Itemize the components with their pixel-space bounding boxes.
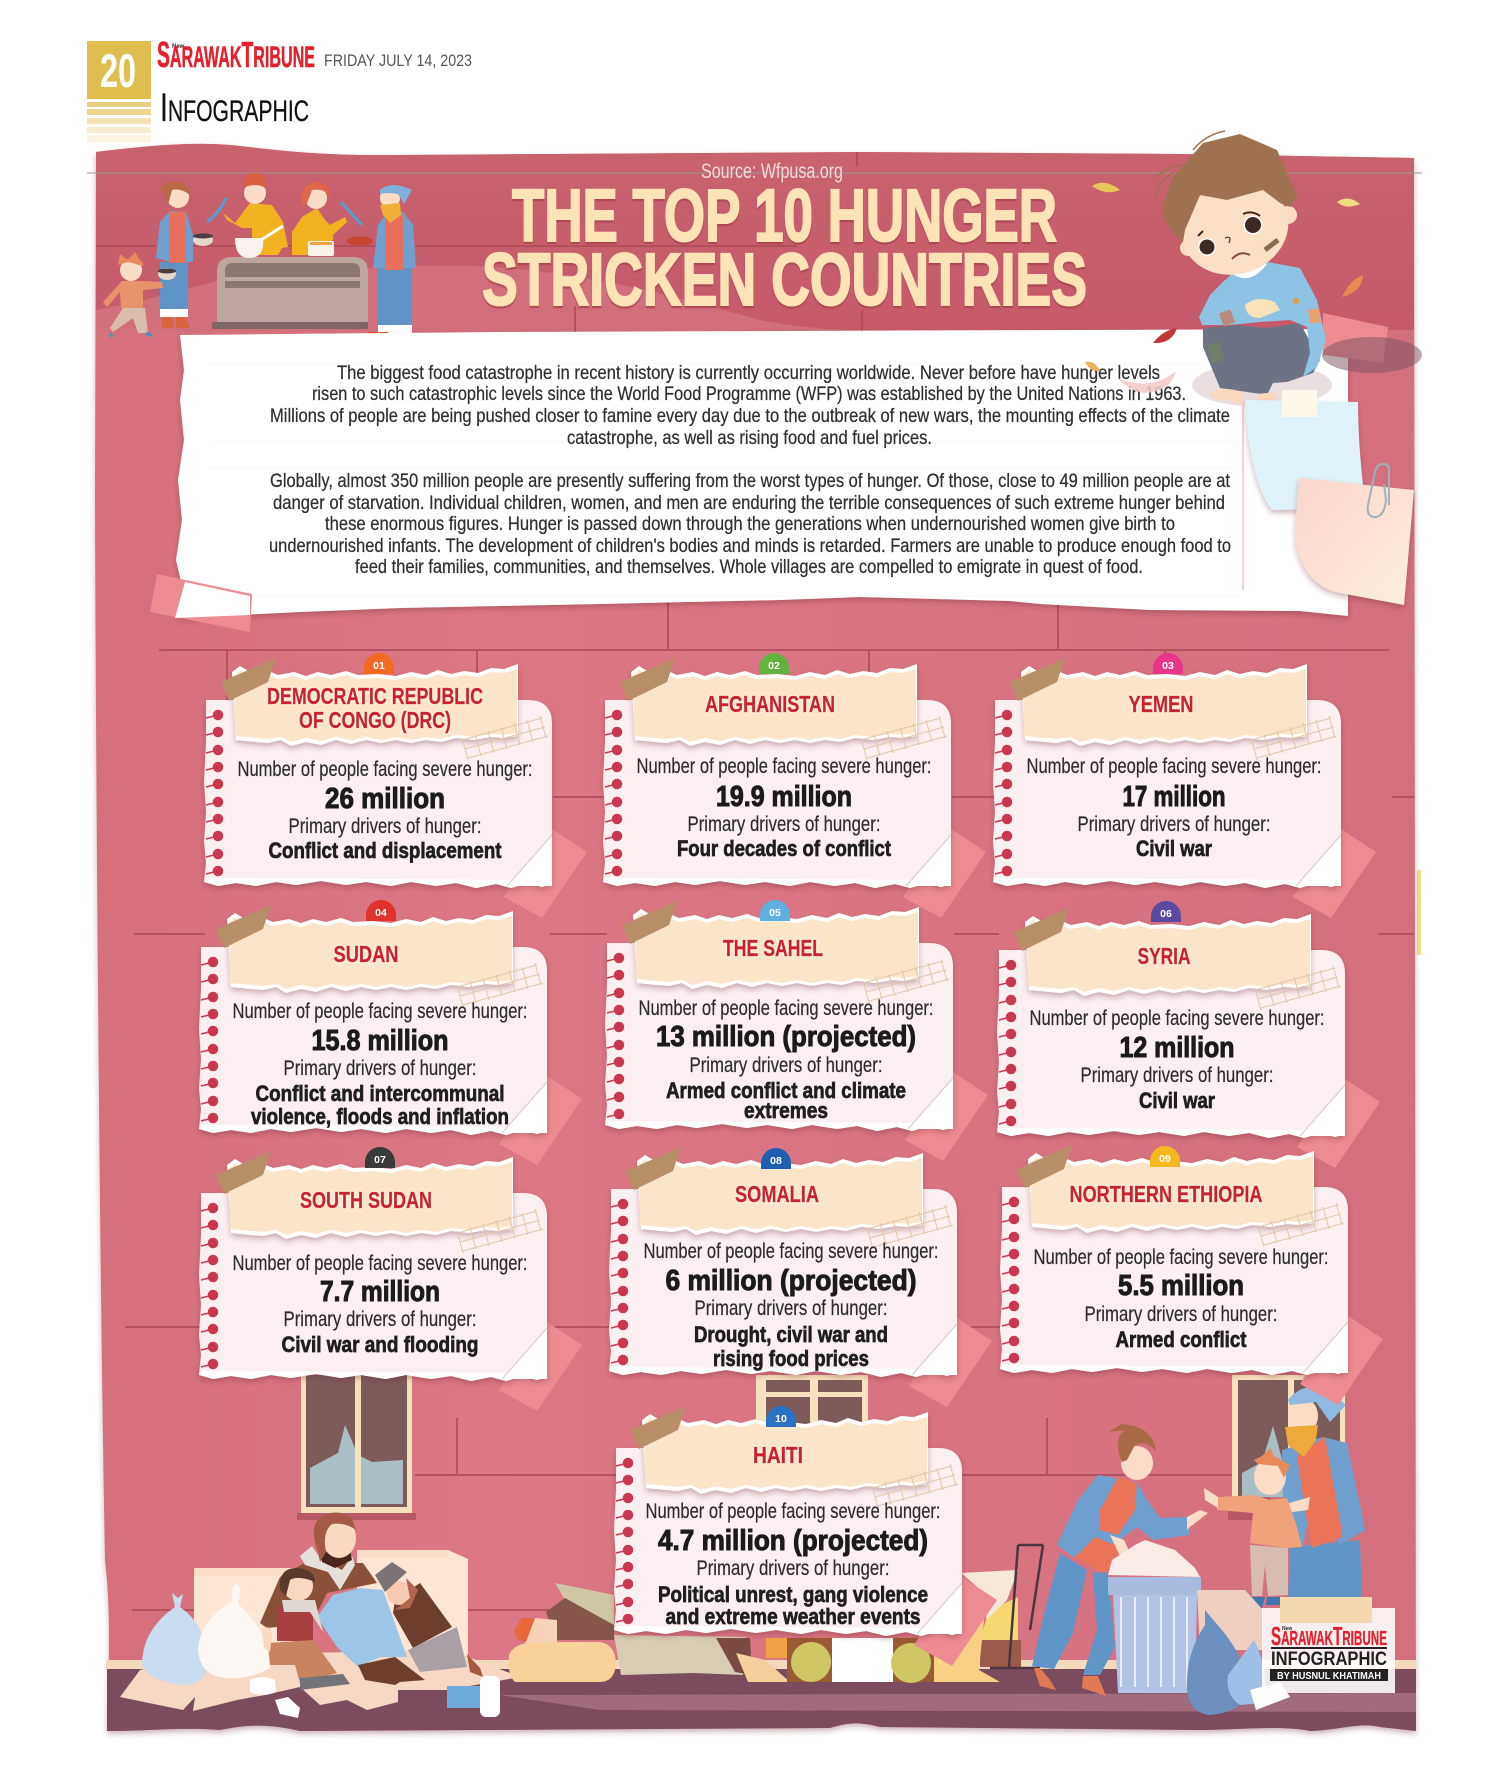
card 09: Northern Ethiopia [1000, 1145, 1383, 1405]
card 04: Sudan: 15.8 million [312, 1025, 448, 1057]
intro text: catastrophe, as well as rising food and fuel prices. [567, 427, 932, 449]
shoes [1034, 1668, 1106, 1696]
card 07: South Sudan: Number of people facing severe hunger: [232, 1252, 528, 1275]
card 02: Afghanistan: Primary drivers of hunger: [688, 813, 880, 836]
window right [1228, 1375, 1345, 1520]
card 09: Northern Ethiopia: Armed conflict [1116, 1327, 1247, 1352]
newspaper masthead: New [172, 44, 185, 50]
badge 05: 05 [769, 907, 781, 919]
card 10: Haiti: Political unrest, gang violence [658, 1582, 928, 1607]
card 05: The Sahel: Primary drivers of hunger: [690, 1054, 882, 1077]
card 09: Northern Ethiopia: NORTHERN ETHIOPIA [1070, 1181, 1262, 1207]
card 10: Haiti: 4.7 million (projected) [658, 1525, 928, 1557]
card 10: Haiti: Number of people facing severe hunger: [646, 1500, 940, 1523]
thin crop line [87, 172, 1422, 174]
stove counter [212, 257, 368, 329]
card 10: Haiti: Primary drivers of hunger: [696, 1557, 890, 1580]
window left [297, 1375, 416, 1520]
card 05: The Sahel: 13 million (projected) [656, 1021, 916, 1053]
card 03: Yemen: Primary drivers of hunger: [1078, 813, 1270, 836]
badge 06 [1151, 901, 1181, 922]
card 08: Somalia: Primary drivers of hunger: [694, 1297, 888, 1320]
illustration: child reaching [1204, 1448, 1302, 1608]
badge 04 [366, 900, 396, 921]
card 08: Somalia: Drought, civil war and [694, 1322, 888, 1347]
mother [260, 1512, 425, 1685]
card 03: Yemen: Civil war [1136, 836, 1212, 861]
cardboard boxes [194, 1550, 468, 1660]
card 03: Yemen: Number of people facing severe hunger: [1026, 755, 1322, 778]
intro text: risen to such catastrophic levels since the World Food Programme (WFP) was established by the United Nations in 1963. [312, 383, 1186, 405]
card 02: Afghanistan [603, 653, 986, 918]
garbage bags [1187, 1590, 1266, 1715]
card 10: Haiti [614, 1406, 997, 1666]
intro text: feed their families, communities, and themselves. Whole villages are compelled to emigrate in quest of food. [355, 556, 1143, 578]
yellow paper bag [934, 1570, 1021, 1682]
pink tape lower-left [150, 574, 252, 632]
badge 01: 01 [373, 660, 385, 672]
badge 07: 07 [374, 1154, 386, 1166]
poster background [95, 144, 1416, 1731]
sleeping man [509, 1583, 746, 1682]
card 08: Somalia: SOMALIA [735, 1181, 819, 1207]
intro text [269, 362, 1231, 578]
card 05: The Sahel: Armed conflict and climate [666, 1078, 906, 1103]
floor cardboard [120, 1650, 520, 1711]
badge 08: 08 [770, 1155, 782, 1167]
card 02: Afghanistan: Number of people facing severe hunger: [636, 755, 932, 778]
card 04: Sudan: Primary drivers of hunger: [284, 1057, 476, 1080]
child left [262, 1568, 350, 1690]
shirt [1075, 1477, 1137, 1573]
badge 09: 09 [1159, 1153, 1171, 1165]
card 04: Sudan [199, 900, 582, 1165]
card 02: Afghanistan: 19.9 million [716, 781, 852, 813]
badge 01 [364, 653, 394, 674]
badge 03 [1153, 653, 1183, 674]
card 07: South Sudan [199, 1147, 582, 1411]
intro text: Globally, almost 350 million people are presently suffering from the worst types of hunger. Of those, close to 49 million people are at [270, 470, 1230, 492]
title: STRICKEN COUNTRIES [482, 238, 1087, 321]
credit stamp: New [1282, 1626, 1292, 1632]
badge 02: 02 [768, 660, 780, 672]
child right [375, 1562, 483, 1677]
card 02: Afghanistan: AFGHANISTAN [705, 691, 835, 717]
pink sticky note [1295, 478, 1414, 605]
card 01: DRC: 26 million [325, 783, 445, 815]
newspaper masthead: SARAWAKTRIBUNE [157, 34, 315, 75]
ears [1180, 206, 1297, 256]
card 05: The Sahel: extremes [744, 1098, 828, 1123]
credit stamp: INFOGRAPHIC [1271, 1649, 1387, 1670]
card 08: Somalia [609, 1147, 992, 1407]
collar [1233, 262, 1267, 278]
hair [1108, 1424, 1156, 1462]
trash bags [142, 1583, 270, 1685]
food pile [716, 1638, 934, 1683]
face [1198, 212, 1278, 259]
intro text: these enormous figures. Hunger is passed down through the generations when undernourished women give birth to [325, 513, 1175, 535]
intro text: danger of starvation. Individual children, women, and men are enduring the terrible consequences of such extreme hunger behind [273, 492, 1225, 514]
badge 05 [760, 900, 790, 921]
card 04: Sudan: Conflict and intercommunal [256, 1081, 504, 1106]
card 03: Yemen: YEMEN [1128, 691, 1194, 717]
card 06: Syria [997, 901, 1380, 1168]
patches [1207, 298, 1321, 363]
woman with bowl [156, 182, 213, 328]
yellow edge sliver [1417, 870, 1421, 955]
volunteer in yellow, right [292, 182, 362, 256]
pink tape behind boy [1323, 313, 1388, 363]
badge 10: 10 [775, 1413, 787, 1425]
title: THE TOP 10 HUNGER [512, 174, 1057, 257]
legs [1203, 323, 1320, 395]
card 05: The Sahel: THE SAHEL [723, 935, 823, 961]
card 04: Sudan: Number of people facing severe hunger: [232, 1000, 528, 1023]
hair [1162, 134, 1297, 242]
intro text: The biggest food catastrophe in recent history is currently occurring worldwide. Never before have hunger levels [337, 362, 1160, 384]
illustration: bearded man [1272, 1386, 1365, 1600]
badge 09 [1150, 1146, 1180, 1167]
card 07: South Sudan: 7.7 million [320, 1276, 440, 1308]
card 01: DRC: DEMOCRATIC REPUBLIC [267, 683, 483, 709]
illustration: volunteers serving food [103, 173, 416, 345]
card 04: Sudan: violence, floods and inflation [251, 1104, 509, 1129]
card 01: DRC: Primary drivers of hunger: [288, 815, 482, 838]
hand and arm [1110, 1510, 1208, 1556]
small child [103, 252, 176, 337]
illustration: sad boy [1155, 131, 1422, 407]
page number tab: 20 [100, 44, 136, 97]
title [482, 174, 1087, 321]
section heading: INFOGRAPHIC [160, 86, 309, 130]
card 08: Somalia: 6 million (projected) [666, 1265, 916, 1297]
card 05: The Sahel [605, 900, 988, 1161]
window middle [756, 1375, 868, 1427]
badge 08 [761, 1148, 791, 1169]
crumpled papers [250, 1677, 300, 1718]
card 06: Syria: SYRIA [1138, 943, 1190, 969]
illustration: family on cardboard [120, 653, 1395, 1718]
card 05: The Sahel: Number of people facing severe hunger: [638, 997, 934, 1020]
badge 06: 06 [1160, 908, 1172, 920]
card 01: DRC: Number of people facing severe hunger: [238, 758, 532, 781]
badge 07 [365, 1147, 395, 1168]
page number tab [87, 41, 151, 142]
bottle and box [447, 1676, 500, 1717]
head [1169, 168, 1301, 288]
source line: Source: Wfpusa.org [701, 160, 843, 183]
card 07: South Sudan: Primary drivers of hunger: [284, 1308, 476, 1331]
badge 10 [766, 1406, 796, 1427]
card 06: Syria: 12 million [1120, 1032, 1234, 1064]
feet [1210, 389, 1276, 405]
icon: leaves [1085, 183, 1363, 393]
date: FRIDAY JULY 14, 2023 [324, 51, 472, 70]
jeans, second leg [1083, 1572, 1115, 1675]
trash can [1108, 1540, 1201, 1693]
badge 02 [759, 653, 789, 674]
card 01: DRC [204, 653, 587, 918]
card 10: Haiti: HAITI [753, 1442, 803, 1468]
grey shadow ellipse [1322, 337, 1422, 373]
card 07: South Sudan: Civil war and flooding [282, 1332, 478, 1357]
card 01: DRC: OF CONGO (DRC) [299, 707, 451, 733]
badge 03: 03 [1162, 660, 1174, 672]
coat [1057, 1475, 1190, 1557]
card 03: Yemen [993, 653, 1376, 918]
card 06: Syria: Primary drivers of hunger: [1080, 1064, 1274, 1087]
badge 04: 04 [375, 907, 387, 919]
card 10: Haiti: and extreme weather events [666, 1604, 920, 1629]
card 07: South Sudan: SOUTH SUDAN [300, 1187, 432, 1213]
trolley [990, 1545, 1043, 1668]
credit stamp: BY HUSNUL KHATIMAH [1277, 1671, 1381, 1682]
card 06: Syria: Number of people facing severe hunger: [1030, 1007, 1324, 1030]
card 04: Sudan: SUDAN [334, 941, 398, 967]
credit stamp [1250, 1597, 1395, 1710]
card 09: Northern Ethiopia: Primary drivers of hunger: [1084, 1303, 1278, 1326]
man with beard [347, 185, 416, 345]
icon: paperclip [1368, 464, 1389, 517]
card 09: Northern Ethiopia: 5.5 million [1118, 1270, 1244, 1302]
blue sticky note [1245, 400, 1366, 510]
card 01: DRC: Conflict and displacement [268, 838, 502, 863]
card 08: Somalia: rising food prices [713, 1346, 869, 1371]
stray hair [1155, 131, 1225, 198]
card 02: Afghanistan: Four decades of conflict [677, 836, 892, 861]
card 08: Somalia: Number of people facing severe hunger: [644, 1240, 938, 1263]
illustration: woman at bin [1032, 1424, 1208, 1696]
jeans [1032, 1553, 1087, 1669]
head [1121, 1446, 1153, 1480]
hand [1245, 299, 1280, 318]
intro text: Millions of people are being pushed closer to famine every day due to the outbreak of new wars, the mounting effects of the climate [270, 405, 1230, 427]
white tape on note [1282, 390, 1317, 417]
note paper: intro panel [150, 329, 1348, 632]
intro text: undernourished infants. The development of children's bodies and minds is retarded. Farmers are unable to produce enough food to [269, 535, 1231, 557]
sweater [1199, 262, 1326, 377]
card 06: Syria: Civil war [1139, 1088, 1215, 1113]
card 09: Northern Ethiopia: Number of people facing severe hunger: [1034, 1246, 1328, 1269]
floor shadow [1192, 363, 1332, 407]
card 03: Yemen: 17 million [1122, 781, 1226, 813]
credit stamp: SARAWAKTRIBUNE [1271, 1621, 1387, 1651]
volunteer in yellow, left [207, 173, 288, 258]
